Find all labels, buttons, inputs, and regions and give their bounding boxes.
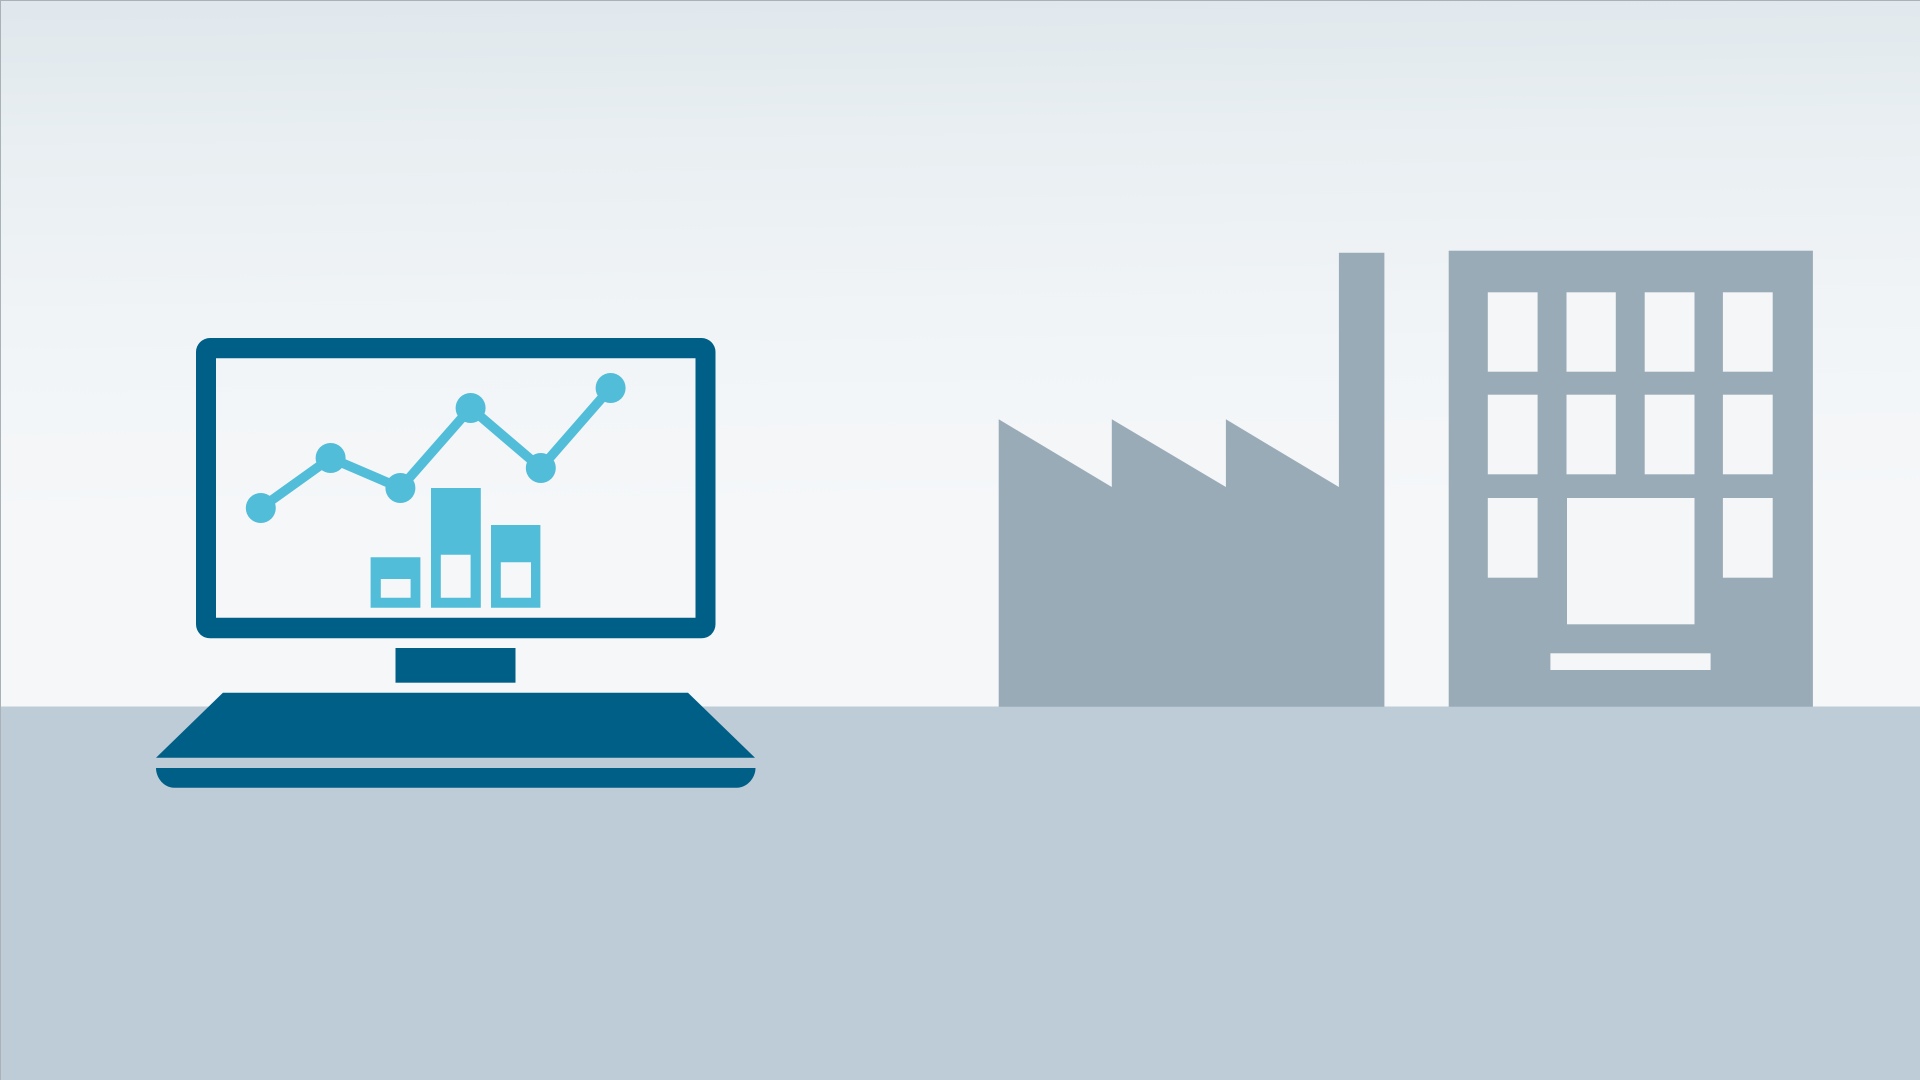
icon: desktop computer xyxy=(156,338,756,788)
icon: office building xyxy=(1449,251,1813,707)
background: ground xyxy=(0,706,1920,1080)
line chart xyxy=(246,373,626,523)
icon: factory silhouette xyxy=(999,253,1384,707)
building windows xyxy=(1488,292,1773,578)
base lower bar xyxy=(156,768,756,788)
bar chart xyxy=(371,488,540,608)
background: sky gradient xyxy=(0,0,1920,706)
monitor frame and screen xyxy=(196,338,716,638)
keyboard base xyxy=(156,693,755,758)
building door xyxy=(1567,498,1694,624)
building sign slot xyxy=(1550,653,1711,670)
building body xyxy=(1449,251,1813,707)
monitor stand xyxy=(396,648,516,683)
